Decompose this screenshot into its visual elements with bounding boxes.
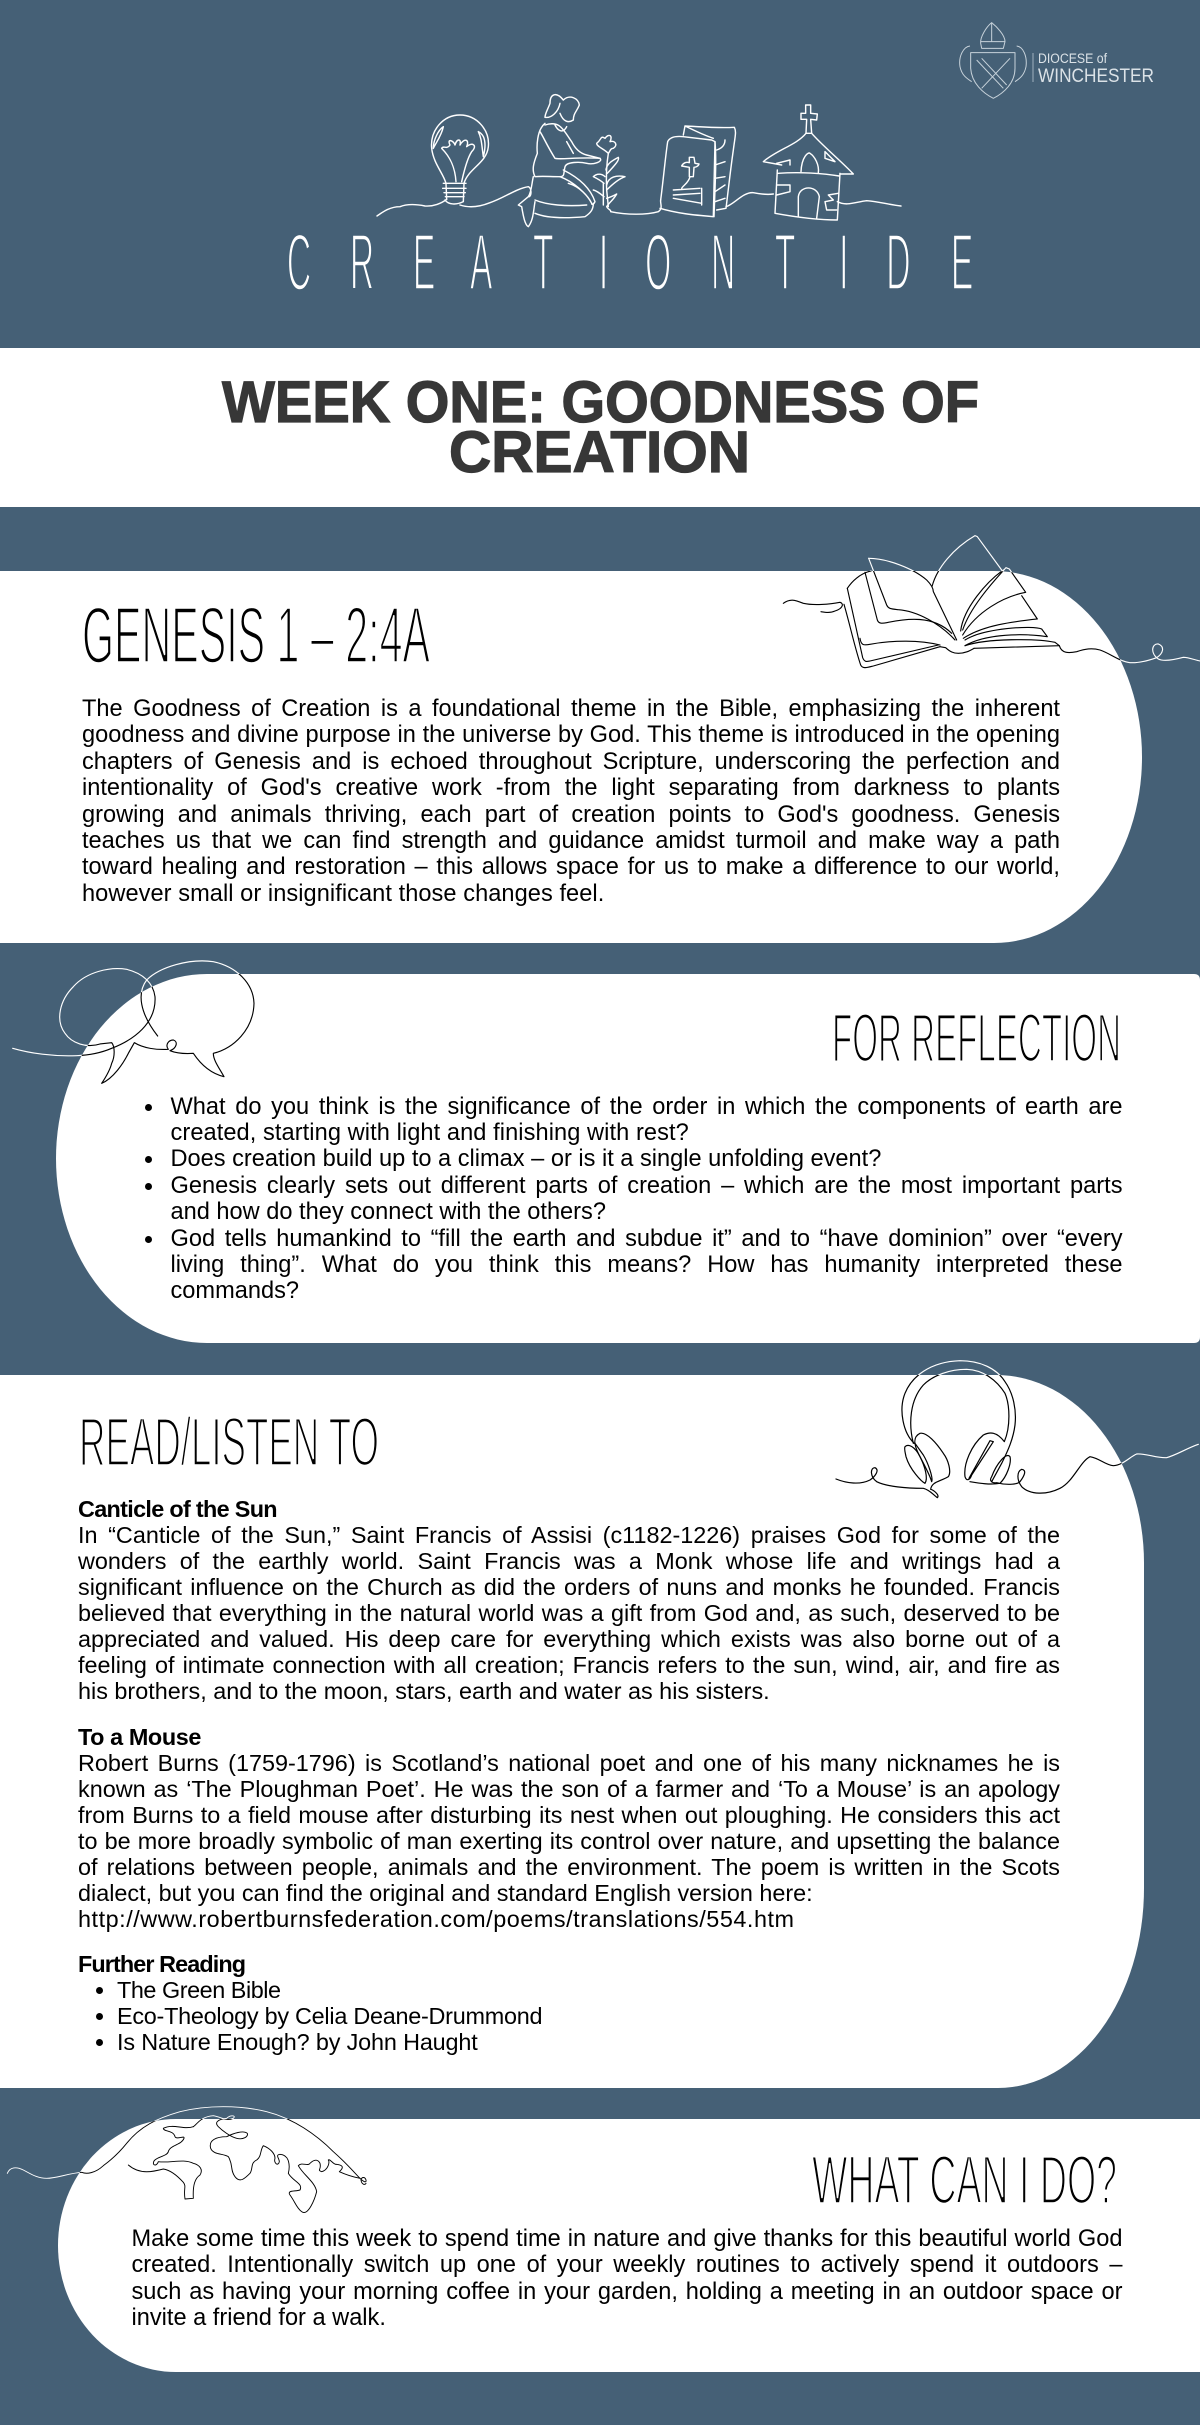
text block: to a mouse: to be more broadly symbolic of man exerting its control over nature, and upsetting the balance [78,1828,1060,1854]
icon: open book line art [783,536,1200,668]
icon: diocese of winchester crest logo [960,23,1026,98]
text block: genesis paragraph: intentionality of God's creative work -from the light separating from darkness to plants [82,775,1060,801]
text block: what can I do paragraph: invite a friend for a walk. [132,2305,386,2331]
heading: week one goodness of creation: WEEK ONE: GOODNESS OF [222,370,979,435]
list: reflection questions: Does creation build up to a climax – or is it a single unfolding event? [170,1146,881,1172]
list: reflection questions: What do you think is the significance of the order in which the components of earth are [170,1094,1122,1120]
list: reflection questions: Genesis clearly sets out different parts of creation – which are the most important parts [170,1173,1122,1199]
logo text: diocese of: DIOCESE of [1038,51,1107,66]
text block: further reading: Further Reading [78,1951,245,1977]
panel: read and listen background [0,1375,1144,2088]
list: reflection questions: created, starting with light and finishing with rest? [170,1120,689,1146]
text block: genesis paragraph [82,696,1060,907]
text block: canticle of the sun [78,1496,1060,1704]
list: reflection questions: God tells humankind to “fill the earth and subdue it” and to “have dominion” over “every [170,1226,1122,1252]
heading: read / listen to: READ/LISTEN TO [79,1404,379,1480]
text block: what can I do paragraph: such as having your morning coffee in your garden, holding a meeting in an outdoor space or [132,2279,1122,2305]
text block: canticle of the sun: In “Canticle of the Sun,” Saint Francis of Assisi (c1182-1226) praises God for some of the [78,1522,1060,1548]
text block: what can I do paragraph: created. Intentionally switch up one of your weekly routines to actively spend it outdoors – [132,2252,1122,2278]
panel: for reflection background [56,974,1200,1343]
text block: canticle of the sun: significant influence on the Church as did the orders of nuns and monks he founded. Francis [78,1574,1060,1600]
text block: what can I do paragraph: Make some time this week to spend time in nature and give thanks for this beautiful world God [132,2226,1122,2252]
text block: genesis paragraph: toward healing and restoration – this allows space for us to make a difference to our world, [82,854,1060,880]
icon: header line art of bulb, gardener, bible and church [377,95,901,227]
text block: genesis paragraph: however small or insignificant those changes feel. [82,881,604,907]
text block: to a mouse: from Burns to a field mouse after disturbing its nest when out ploughing. He considers this act [78,1802,1060,1828]
text block: what can I do paragraph [132,2226,1122,2331]
text block: to a mouse: of relations between people, animals and the environment. The poem is written in the Scots [78,1854,1060,1880]
text block: canticle of the sun: wonders of the earthly world. Saint Francis was a Monk whose life and writings had a [78,1548,1060,1574]
text block: canticle of the sun: his brothers, and to the moon, stars, earth and water as his sisters. [78,1678,770,1704]
icon: globe line art [7,2107,366,2213]
text block: canticle of the sun: feeling of intimate connection with all creation; Francis refers to the sun, wind, air, and fire as [78,1652,1060,1678]
heading: genesis 1 - 2:4a: GENESIS 1 – 2:4A [82,590,430,680]
heading: week one goodness of creation [222,370,979,485]
list: reflection questions: living thing”. What do you think this means? How has humanity interpreted these [170,1252,1122,1278]
text block: to a mouse: To a Mouse [78,1724,201,1750]
text block: further reading [78,1951,542,2055]
list: reflection questions: commands? [170,1278,299,1304]
list: reflection questions [145,1094,1122,1304]
text block: canticle of the sun: Canticle of the Sun [78,1496,277,1522]
text block: genesis paragraph: chapters of Genesis and is echoed throughout Scripture, underscoring the perfection and [82,749,1060,775]
panel: what can I do background [58,2119,1200,2372]
logo text: winchester: WINCHESTER [1038,66,1154,87]
text block: genesis paragraph: growing and animals thriving, each part of creation points to God's goodness. Genesis [82,802,1060,828]
white title band [0,348,1200,507]
panel: genesis background [0,571,1142,943]
text block: to a mouse: known as ‘The Ploughman Poet’. He was the son of a farmer and ‘To a Mouse’ is an apology [78,1776,1060,1802]
text block: genesis paragraph: The Goodness of Creation is a foundational theme in the Bible, emphasizing the inherent [82,696,1060,722]
text block: to a mouse: http://www.robertburnsfederation.com/poems/translations/554.htm [78,1906,795,1932]
text block: further reading: Is Nature Enough? by John Haught [117,2029,478,2055]
text block: genesis paragraph: goodness and divine purpose in the universe by God. This theme is introduced in the opening [82,722,1060,748]
text block: canticle of the sun: appreciated and valued. His deep care for everything which exists was also borne out of a [78,1626,1060,1652]
text block: to a mouse: dialect, but you can find the original and standard English version here: [78,1880,813,1906]
heading: week one goodness of creation: CREATION [449,420,750,485]
icon: speech bubbles line art [13,961,254,1083]
text block: genesis paragraph: teaches us that we can find strength and guidance amidst turmoil and make way a path [82,828,1060,854]
text block: further reading: Eco-Theology by Celia Deane-Drummond [117,2003,542,2029]
text block: further reading: The Green Bible [117,1977,281,2003]
icon: headphones line art [836,1361,1198,1498]
text block: to a mouse [78,1724,1060,1932]
logo divider [1032,53,1034,82]
list: reflection questions: and how do they connect with the others? [170,1199,606,1225]
text block: canticle of the sun: believed that everything in the natural world was a gift from God and, as such, deserved to be [78,1600,1060,1626]
title: creationtide: CREATIONTIDE [287,218,973,308]
text block: to a mouse: Robert Burns (1759-1796) is Scotland’s national poet and one of his many nicknames he is [78,1750,1060,1776]
